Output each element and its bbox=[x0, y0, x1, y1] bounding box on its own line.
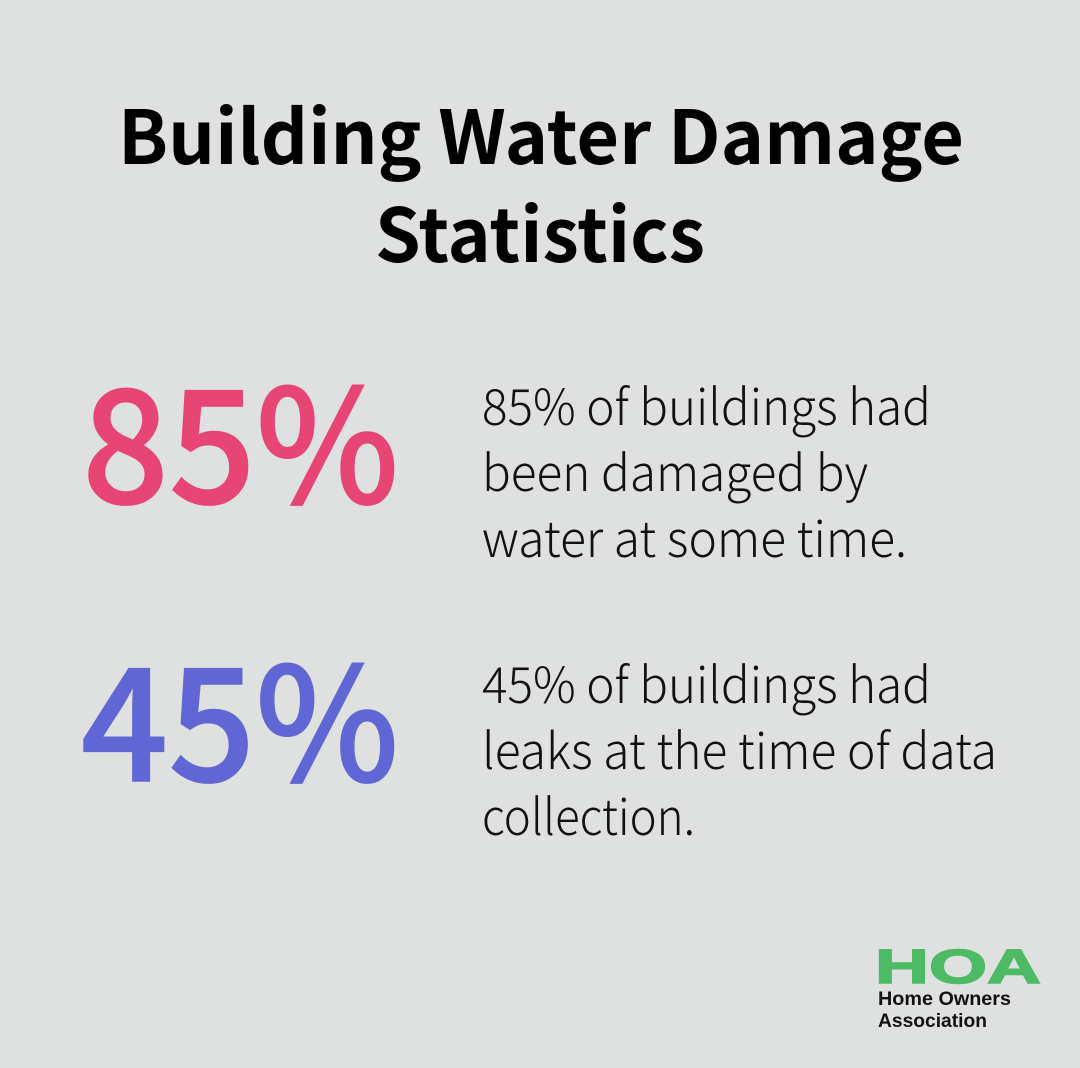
stat: 45%: 45% bbox=[81, 600, 399, 827]
description: 85% of buildings: 85% of buildings had bbox=[482, 368, 931, 440]
logo name bbox=[878, 989, 1011, 1032]
logo: HOA Home Owners Association bbox=[875, 941, 1041, 1032]
title bbox=[118, 79, 964, 284]
description: 85% of buildings: water at some time. bbox=[482, 500, 907, 572]
description: 45% of buildings bbox=[482, 646, 997, 850]
title: Building Water Damage bbox=[118, 79, 964, 186]
description: 85% of buildings bbox=[482, 368, 931, 572]
logo mark: HOA: HOA bbox=[875, 941, 1041, 994]
description: 45% of buildings: collection. bbox=[482, 778, 695, 850]
logo name: Association bbox=[878, 1011, 987, 1032]
description: 45% of buildings: leaks at the time of data bbox=[482, 712, 997, 784]
description: 85% of buildings: been damaged by bbox=[482, 434, 868, 506]
stat: 85%: 85% bbox=[82, 322, 399, 549]
logo name: Home Owners bbox=[878, 989, 1011, 1010]
description: 45% of buildings: 45% of buildings had bbox=[482, 646, 931, 718]
title: Statistics bbox=[375, 177, 705, 284]
